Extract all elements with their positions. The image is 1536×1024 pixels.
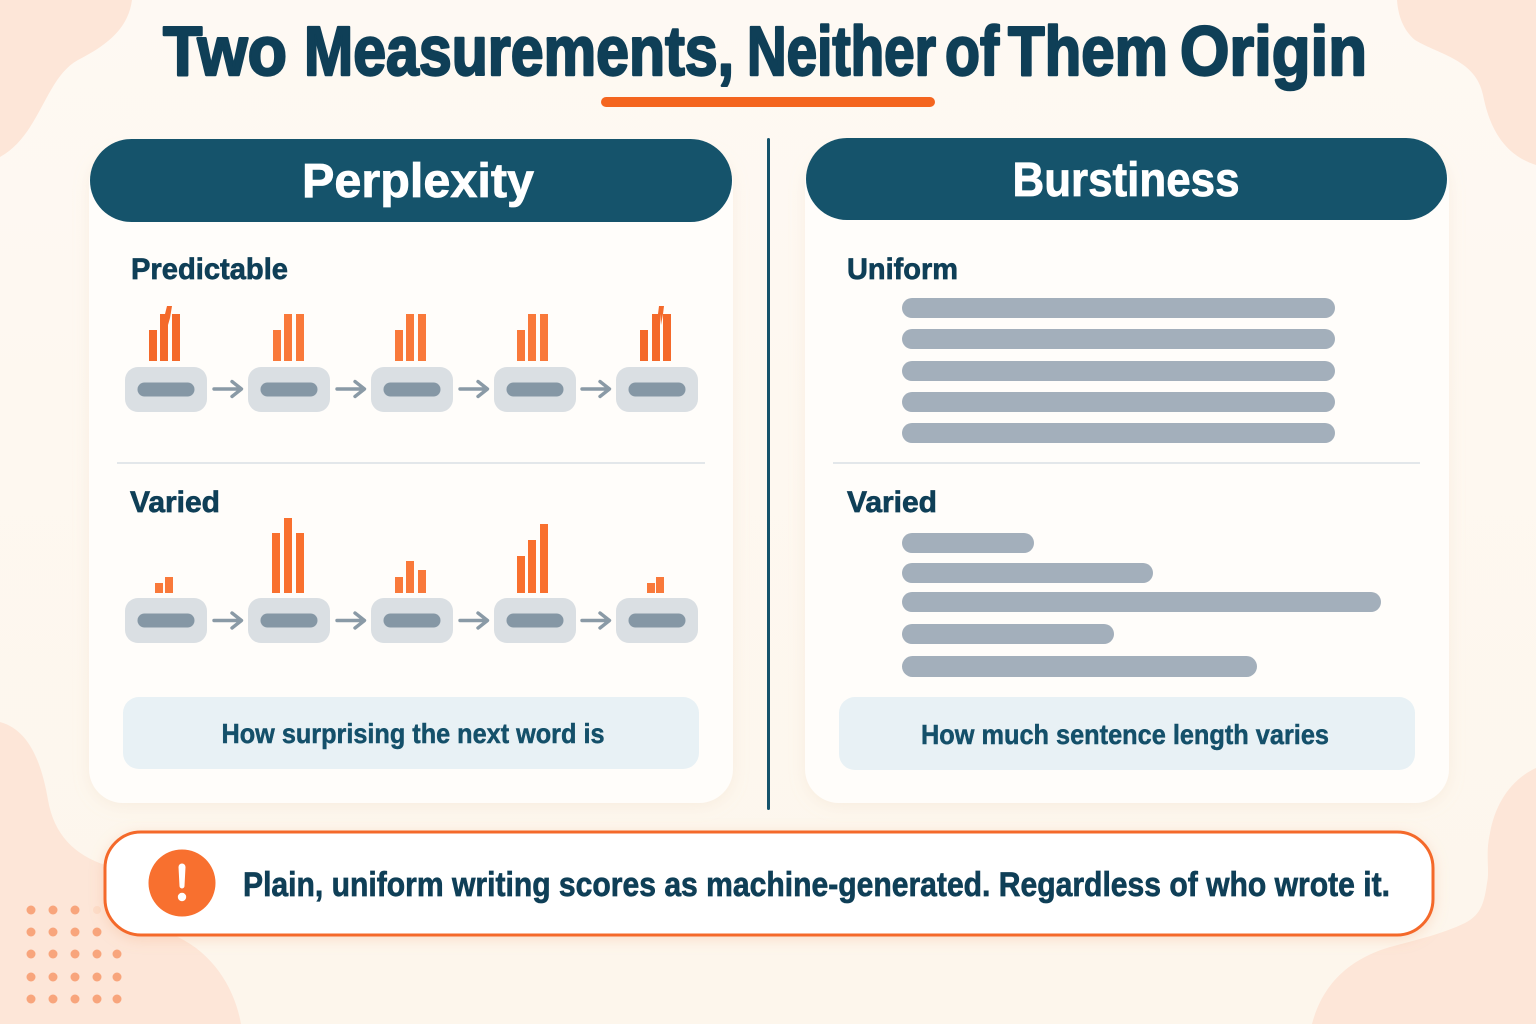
caption: perplexity — [123, 697, 699, 769]
heading: burstiness: Burstiness — [1012, 154, 1240, 207]
chart: predictable token sequence — [125, 306, 698, 412]
caption: burstiness — [839, 697, 1415, 770]
callout text: Plain, uniform writing scores as machine-generated. Regardless of who wrote it. — [243, 866, 1390, 904]
icon: warning — [148, 850, 216, 916]
title: Neither — [747, 12, 936, 90]
title: Measurements, — [304, 12, 734, 90]
heading: burstiness — [806, 138, 1447, 220]
caption: perplexity: How surprising the next word is — [222, 718, 604, 749]
chart: varied token sequence — [125, 518, 698, 643]
heading: perplexity — [90, 139, 732, 222]
callout — [105, 832, 1433, 935]
title: Origin — [1180, 12, 1367, 90]
panel: perplexity — [89, 139, 733, 803]
varied sentence bars — [902, 533, 1381, 677]
label: varied: Varied — [130, 486, 220, 519]
caption: burstiness: How much sentence length varies — [921, 719, 1329, 750]
label: varied: Varied — [847, 486, 937, 519]
title: Two — [163, 12, 287, 90]
label: predictable: Predictable — [131, 253, 288, 286]
title underline — [601, 97, 935, 107]
label: uniform: Uniform — [847, 253, 958, 286]
heading: perplexity: Perplexity — [302, 155, 534, 208]
panel: burstiness — [805, 138, 1449, 803]
center divider — [767, 138, 770, 810]
title: Them — [1008, 12, 1168, 90]
uniform sentence bars — [902, 298, 1335, 443]
title — [163, 12, 1367, 90]
title: of — [945, 12, 1000, 90]
dot pattern — [26, 906, 122, 1004]
